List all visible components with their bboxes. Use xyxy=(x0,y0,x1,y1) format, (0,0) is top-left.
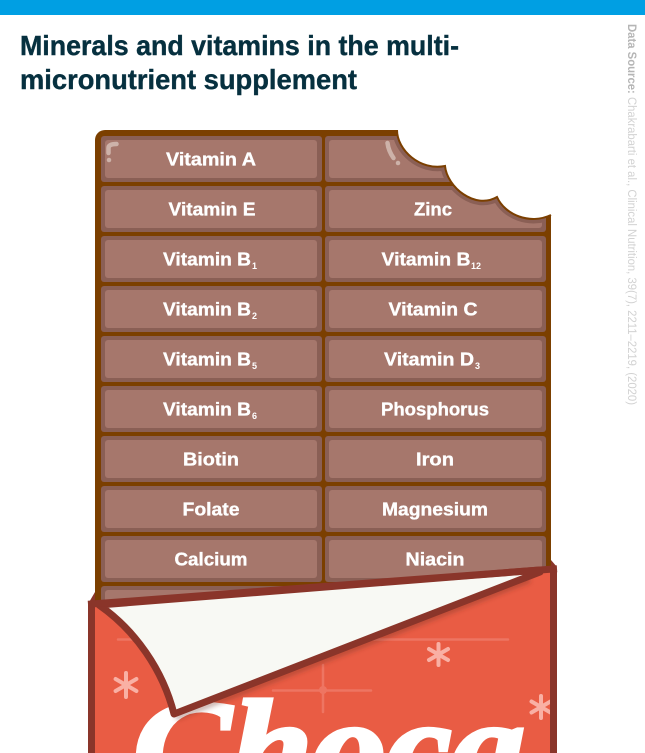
top band xyxy=(0,0,645,15)
labels: right column: Vitamin D xyxy=(384,350,474,370)
labels: right column: 12 xyxy=(471,261,481,271)
labels: left column: Vitamin B xyxy=(163,350,251,370)
labels: left column: Vitamin A xyxy=(166,150,256,170)
wrapper xyxy=(88,560,557,753)
labels: left column: 1 xyxy=(252,261,257,271)
fold shadow xyxy=(176,580,530,718)
labels: right column: Iron xyxy=(416,450,454,470)
labels: left column: 2 xyxy=(252,311,257,321)
wrapper side edges xyxy=(92,569,554,753)
star right xyxy=(532,696,550,718)
bite shadow xyxy=(397,130,551,219)
labels: left column: Vitamin B xyxy=(163,250,251,270)
shine highlights xyxy=(108,143,398,163)
title: micronutrient supplement xyxy=(20,64,357,95)
bar base xyxy=(95,130,551,640)
labels: right column: Magnesium xyxy=(382,500,488,520)
star middle xyxy=(429,644,448,665)
wrapper corners xyxy=(88,560,557,606)
peeled paper xyxy=(99,570,540,714)
wrapper top edge xyxy=(88,569,557,604)
labels: left column: Folate xyxy=(182,500,240,520)
labels: left column xyxy=(163,150,257,570)
labels: right column: Vitamin C xyxy=(388,300,478,320)
title: Minerals and vitamins in the multi- xyxy=(20,30,459,61)
labels: left column: Calcium xyxy=(174,550,248,570)
wrapper decoration xyxy=(116,640,550,753)
labels: right column: 3 xyxy=(475,361,480,371)
star left xyxy=(116,673,136,697)
labels: right column: Niacin xyxy=(406,550,464,570)
data source: Data Source: Chakrabarti et al., Clinical Nutrition, 39(7), 2211–2219, (2020) xyxy=(625,24,637,405)
labels: right column: Phosphorus xyxy=(381,400,489,420)
title xyxy=(20,30,459,95)
labels: left column: Vitamin B xyxy=(163,400,251,420)
labels: left column: Vitamin E xyxy=(168,200,256,220)
bite xyxy=(397,120,562,219)
chocolate squares xyxy=(101,136,546,632)
labels: left column: Biotin xyxy=(183,450,239,470)
labels: right column: Vitamin B xyxy=(382,250,471,270)
labels: left column: 6 xyxy=(252,411,257,421)
wrapper body xyxy=(92,569,554,753)
labels: left column: Vitamin B xyxy=(163,300,251,320)
labels: left column: 5 xyxy=(252,361,257,371)
chocolate bar xyxy=(95,130,552,600)
labels: right column xyxy=(381,200,489,570)
labels: right column: Zinc xyxy=(414,200,452,220)
